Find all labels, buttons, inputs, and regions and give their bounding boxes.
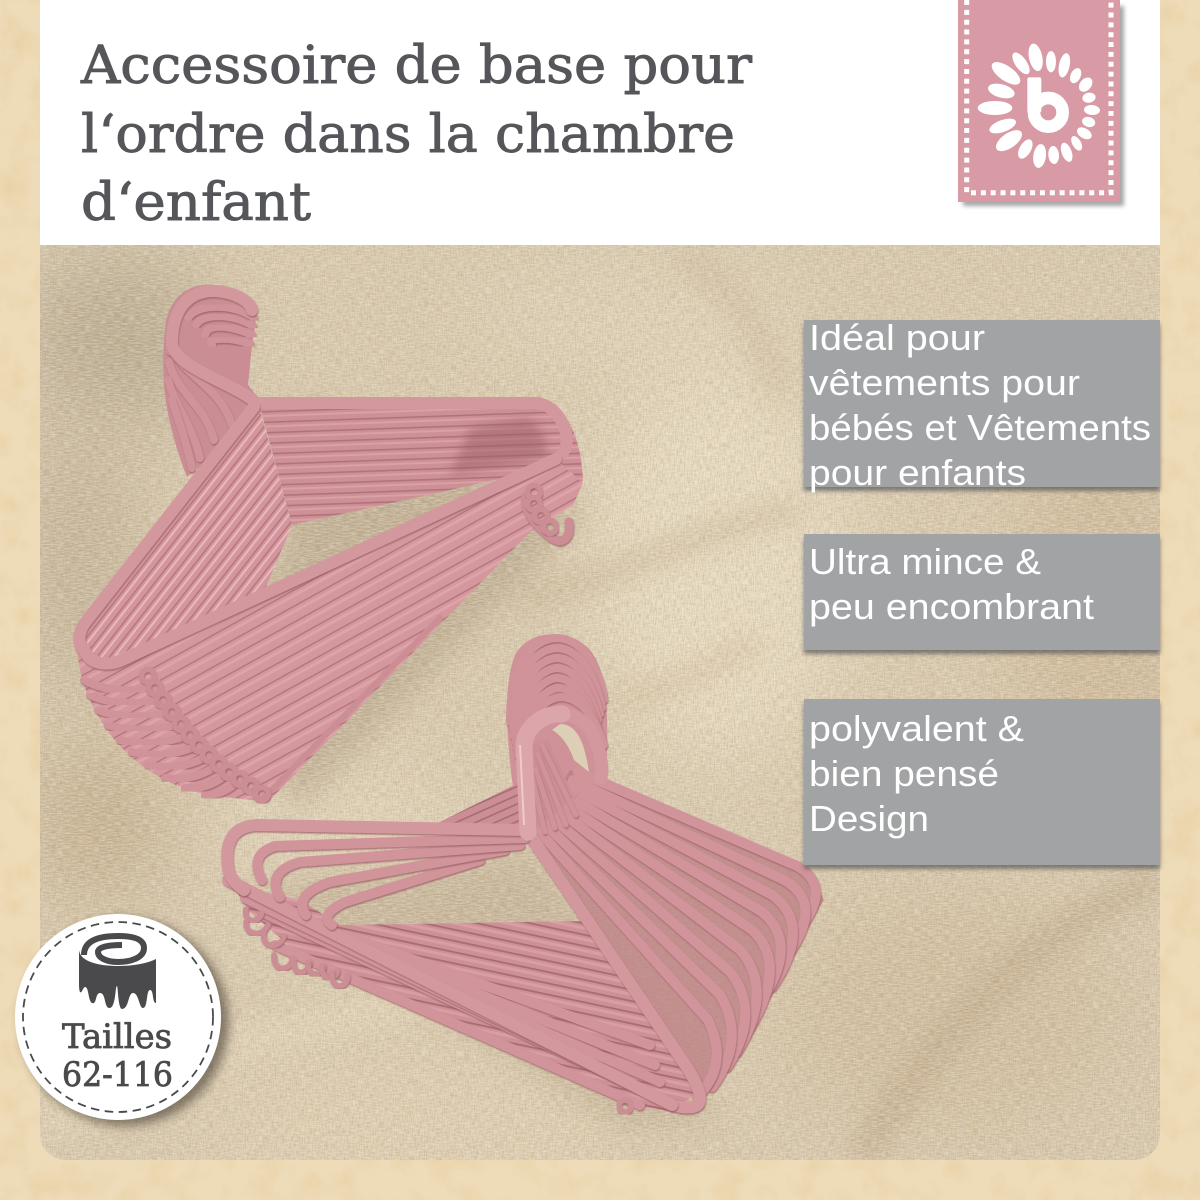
lower band	[232, 885, 706, 1112]
back arm	[432, 782, 528, 828]
fabric light and shadow folds	[20, 250, 1190, 1200]
front hook	[520, 714, 602, 835]
linen fabric photo panel	[20, 245, 1190, 1200]
hook ring chain	[142, 486, 569, 800]
badge text: 62-116	[62, 1055, 173, 1095]
icon: flower logo with letter b	[978, 42, 1100, 169]
badge text: Tailles	[62, 1017, 172, 1057]
stacked rounded corners	[84, 680, 240, 795]
lower arm band	[78, 459, 583, 802]
back hook	[163, 285, 260, 477]
logo tag	[958, 0, 1124, 206]
hanger stack: upper left	[76, 285, 583, 802]
feature box 2: Ultra mince &	[809, 541, 1041, 582]
feature box 3: Design	[809, 798, 929, 839]
feature box 2: peu encombrant	[809, 586, 1094, 627]
icon: measuring tape roll	[79, 936, 156, 1009]
right fan of hanger arms	[530, 770, 824, 1108]
hook opening showing fabric	[552, 724, 589, 772]
long lower rim	[228, 880, 672, 1105]
left arm band	[76, 403, 292, 660]
title	[80, 36, 752, 233]
header white panel	[40, 0, 1160, 245]
feature box 1: bébés et Vêtements	[809, 407, 1151, 448]
title: d‘enfant	[81, 173, 311, 233]
title: l‘ordre dans la chambre	[81, 105, 735, 165]
feature box 2	[804, 534, 1160, 654]
left arm lines	[227, 825, 527, 925]
back hook	[507, 634, 607, 830]
size badge	[15, 914, 229, 1126]
feature box 3: polyvalent &	[809, 708, 1024, 749]
hook ring chain	[246, 909, 631, 1112]
top arm band	[258, 397, 583, 525]
hanger stack: lower right	[227, 634, 824, 1112]
title: Accessoire de base pour	[80, 36, 752, 96]
feature box 1: vêtements pour	[809, 362, 1080, 403]
feature box 3: bien pensé	[809, 753, 999, 794]
feature box 1: Idéal pour	[809, 317, 985, 358]
feature box 3	[804, 699, 1160, 869]
feature box 1: pour enfants	[809, 452, 1026, 493]
feature box 1	[804, 317, 1160, 493]
